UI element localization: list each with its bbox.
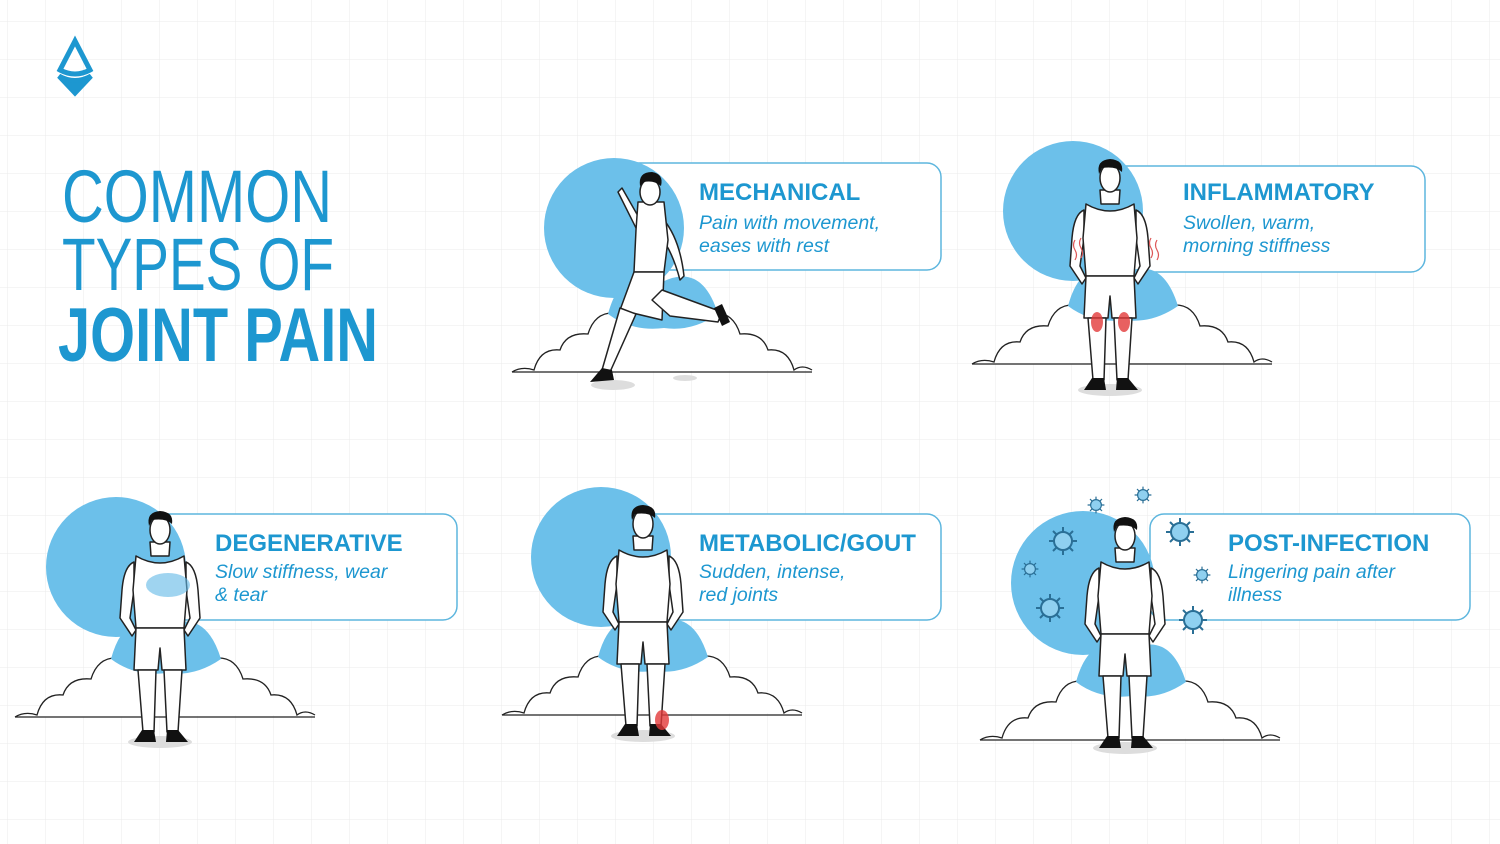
text: metabolic: Sudden, intense, (699, 561, 845, 583)
panel: metabolic (502, 487, 941, 742)
text: degenerative: Slow stiffness, wear (215, 561, 389, 583)
title: JOINT PAIN (58, 293, 378, 378)
text: post-infection: illness (1228, 584, 1282, 606)
text: degenerative: & tear (215, 584, 269, 606)
panel: mechanical (512, 158, 941, 390)
text: post-infection: POST-INFECTION (1228, 530, 1429, 557)
text: degenerative: DEGENERATIVE (215, 530, 403, 557)
text: post-infection (1228, 530, 1429, 606)
text: metabolic: red joints (699, 584, 778, 606)
text: metabolic: METABOLIC/GOUT (699, 530, 916, 557)
text: degenerative (215, 530, 403, 606)
panel: inflammatory (972, 141, 1425, 396)
icon: viruses (1022, 487, 1210, 634)
text: inflammatory (1183, 179, 1375, 257)
title: COMMON (62, 155, 332, 238)
logo (59, 41, 91, 93)
text: metabolic (699, 530, 916, 606)
text: post-infection: Lingering pain after (1228, 561, 1396, 583)
text: mechanical: eases with rest (699, 235, 831, 257)
panel: post-infection (980, 487, 1470, 754)
text: mechanical: MECHANICAL (699, 179, 860, 206)
text: mechanical (699, 179, 880, 257)
text: mechanical: Pain with movement, (699, 212, 880, 234)
panel: degenerative (15, 497, 457, 748)
text: inflammatory: Swollen, warm, (1183, 212, 1315, 234)
text: inflammatory: INFLAMMATORY (1183, 179, 1375, 206)
title: TYPES OF (62, 223, 334, 306)
title (58, 155, 378, 378)
text: inflammatory: morning stiffness (1183, 235, 1331, 257)
